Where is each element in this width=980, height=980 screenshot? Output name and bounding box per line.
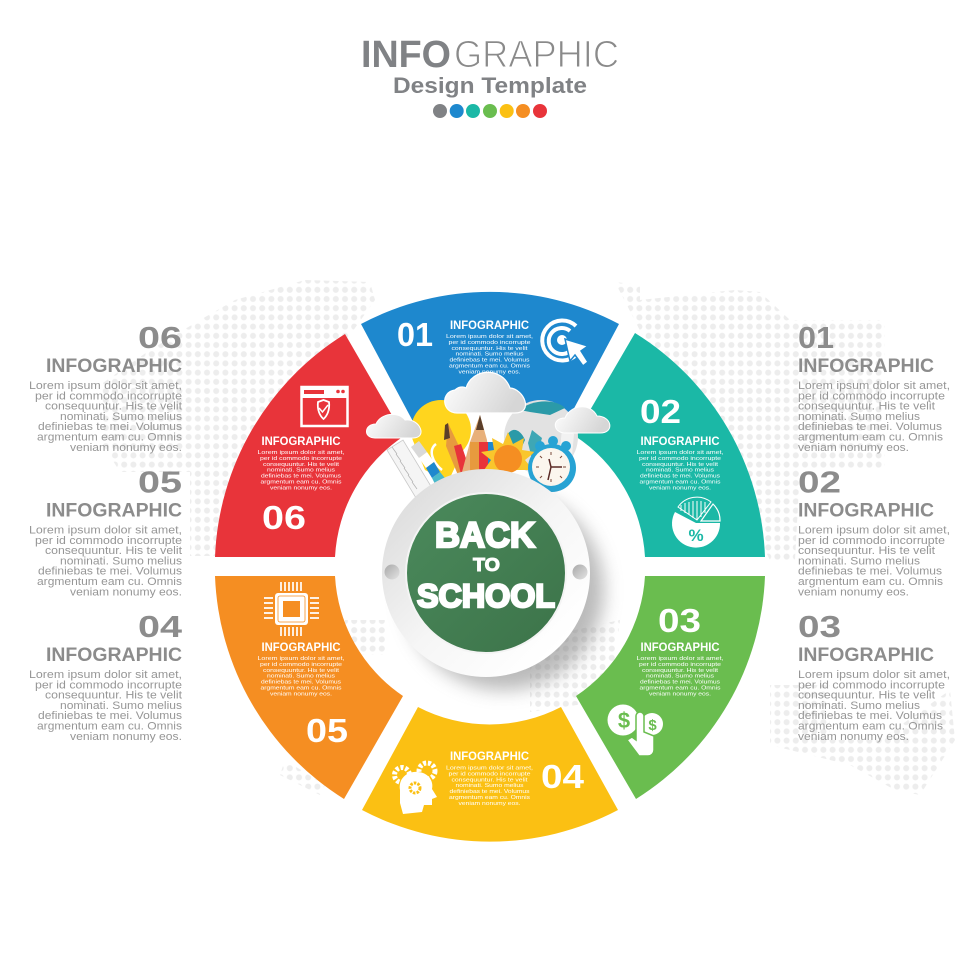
right rivet [572,564,588,580]
side text: 06: 06 [138,320,182,355]
side text: 05: definiebas te mei. Volumus [38,566,183,578]
heading and body 02: veniam nonumy eos. [649,485,711,491]
number 03: 03 [658,602,701,639]
center badge [382,469,590,677]
heading and body 01: definiebas te mei. Volumus [450,358,530,364]
heading and body 03: argmentum eam cu. Omnis [640,686,721,692]
heading and body 02: argmentum eam cu. Omnis [640,480,721,486]
heading and body 02: definiebas te mei. Volumus [640,474,720,480]
side text: 05: consequuntur. His te velit [45,545,182,557]
side text: 06: argmentum eam cu. Omnis [37,432,183,444]
heading and body 02: nominati. Sumo melius [646,468,714,474]
cloud: center large [445,372,525,413]
side text: 02: per id commodo incorrupte [798,535,945,547]
heading and body 01 [446,318,533,375]
cloud: right small [555,407,610,433]
icon: ruler [387,440,432,498]
side text: 03: 03 [798,609,841,644]
heading and body 06: nominati. Sumo melius [267,468,335,474]
side text: 06 [29,320,183,454]
side text: 01: INFOGRAPHIC [798,356,934,377]
side text: 04: veniam nonumy eos. [70,731,182,743]
panel: segment 04 yellow [362,707,618,842]
panel: segment 05 orange [215,576,403,799]
side text: 03 [798,609,950,743]
subtitle: Design Template [393,73,587,98]
side text: 04: INFOGRAPHIC [46,645,182,666]
side text: 03: consequuntur. His te velit [798,690,935,702]
icon: bulb base swatches [411,441,448,490]
left rivet [384,564,400,580]
side text: 01: 01 [798,320,834,355]
heading and body 04: INFOGRAPHIC [450,749,529,763]
side text: 02: Lorem ipsum dolor sit amet, [798,524,950,536]
heading and body 06: per id commodo incorrupte [260,456,343,462]
side text: 01: argmentum eam cu. Omnis [798,432,944,444]
icon: microchip [264,582,319,636]
heading and body 05: nominati. Sumo melius [267,674,335,680]
text: TO: TO [473,555,500,575]
icon: light bulb [411,400,471,482]
side text: 03: INFOGRAPHIC [798,645,934,666]
side text: 06: nominati. Sumo melius [60,411,183,423]
heading and body 02: Lorem ipsum dolor sit amet, [636,450,724,456]
text: BACK: BACK [435,516,535,555]
heading and body 01: argmentum eam cu. Omnis [449,364,530,370]
heading and body 01: nominati. Sumo melius [456,352,524,358]
number 02: 02 [640,393,681,430]
number 05: 05 [306,712,348,749]
heading and body 06: veniam nonumy eos. [270,485,332,491]
side text: 03: per id commodo incorrupte [798,679,945,691]
icon: pie chart with percent [672,497,720,548]
side text: 05: nominati. Sumo melius [60,555,183,567]
side text: 01: consequuntur. His te velit [798,401,935,413]
heading and body 05: per id commodo incorrupte [260,662,343,668]
text: SCHOOL: SCHOOL [417,578,555,614]
side text: 03: Lorem ipsum dolor sit amet, [798,669,950,681]
heading and body 06: consequuntur. His te velit [263,462,339,468]
heading and body 02: per id commodo incorrupte [639,456,722,462]
heading and body 06: definiebas te mei. Volumus [261,474,341,480]
icon: globe [504,400,578,474]
icon: dollar coins and pointing hand: $ [648,717,657,734]
side text: 05: INFOGRAPHIC [46,500,182,522]
heading and body 04: consequuntur. His te velit [452,777,528,783]
icon: dollar coins and pointing hand: $ [618,708,630,733]
side text: 02: INFOGRAPHIC [798,500,934,522]
number 01: 01 [397,316,433,353]
side text: 02: argmentum eam cu. Omnis [798,576,944,588]
side text: 06: per id commodo incorrupte [35,390,182,402]
heading and body 01: INFOGRAPHIC [450,318,529,332]
school supplies cluster [387,400,578,498]
heading and body 02: INFOGRAPHIC [640,434,720,448]
icon: coloured pencils [444,415,496,480]
heading and body 01: consequuntur. His te velit [452,346,528,352]
heading and body 06: Lorem ipsum dolor sit amet, [258,450,345,456]
heading and body 03: per id commodo incorrupte [639,662,722,668]
heading and body 04: Lorem ipsum dolor sit amet, [446,766,533,772]
side text: 02: veniam nonumy eos. [798,586,909,598]
heading and body 05: Lorem ipsum dolor sit amet, [258,656,345,662]
side text: 04: 04 [138,609,183,644]
heading and body 03: Lorem ipsum dolor sit amet, [636,656,724,662]
heading and body 05: INFOGRAPHIC [262,640,341,654]
panel: segment 06 red [215,334,404,557]
side text: 06: Lorem ipsum dolor sit amet, [29,380,182,392]
icon: sun [481,432,535,473]
heading and body 03 [636,640,724,697]
ring drop shadow [404,490,604,690]
title word: GRAPHIC: GRAPHIC [454,34,619,76]
heading and body 06 [258,434,345,491]
side text: 02: nominati. Sumo melius [798,555,921,567]
heading and body 03: consequuntur. His te velit [642,668,718,674]
side text: 03: argmentum eam cu. Omnis [798,720,944,732]
side text: 06: consequuntur. His te velit [45,401,182,413]
heading and body 01: Lorem ipsum dolor sit amet, [446,334,533,340]
heading and body 05: veniam nonumy eos. [270,691,332,697]
outer white ring [382,469,590,677]
side text: 01: Lorem ipsum dolor sit amet, [798,380,950,392]
number 04: 04 [541,758,585,795]
side text: 02 [798,464,950,598]
dotted world map background [100,280,955,795]
side text: 04: definiebas te mei. Volumus [38,710,183,722]
heading and body 06: INFOGRAPHIC [262,434,341,448]
side text: 05: Lorem ipsum dolor sit amet, [29,524,182,536]
icon: browser window with shield [302,387,348,426]
heading and body 01: veniam nonumy eos. [458,369,521,375]
number 06: 06 [262,499,306,536]
heading and body 05: argmentum eam cu. Omnis [260,686,342,692]
side text: 02: 02 [798,464,841,500]
side text: 05: per id commodo incorrupte [35,535,182,547]
side text: 06: INFOGRAPHIC [46,356,182,377]
side text: 01: veniam nonumy eos. [798,442,909,454]
heading and body 03: INFOGRAPHIC [640,640,720,654]
side text: 04: per id commodo incorrupte [35,679,182,691]
heading and body 04: argmentum eam cu. Omnis [449,795,530,801]
side text: 04: nominati. Sumo melius [60,700,183,712]
side text: 01: per id commodo incorrupte [798,390,945,402]
icon: alarm clock [528,436,576,492]
icon: pie chart with percent: % [688,526,704,545]
side text: 05: 05 [138,464,182,500]
heading and body 05 [258,640,345,697]
side text: 05 [29,464,183,598]
side text: 05: argmentum eam cu. Omnis [37,576,183,588]
side text: 06: definiebas te mei. Volumus [38,421,183,433]
side text: 01: definiebas te mei. Volumus [798,421,943,433]
side text: 03: veniam nonumy eos. [798,731,909,743]
side text: 04: consequuntur. His te velit [45,690,182,702]
side text: 05: veniam nonumy eos. [70,586,182,598]
side text: 02: definiebas te mei. Volumus [798,566,943,578]
side text: 01: nominati. Sumo melius [798,411,921,423]
heading and body 04: veniam nonumy eos. [458,801,521,807]
heading and body 04: definiebas te mei. Volumus [450,789,530,795]
heading and body 01: per id commodo incorrupte [448,340,531,346]
heading and body 04: per id commodo incorrupte [448,771,531,777]
side text: 03: nominati. Sumo melius [798,700,921,712]
heading and body 04 [446,749,533,807]
side text: 04: Lorem ipsum dolor sit amet, [29,669,182,681]
cloud: left small [366,414,421,438]
heading and body 03: nominati. Sumo melius [646,674,714,680]
heading and body 02 [636,434,724,491]
heading and body 06: argmentum eam cu. Omnis [260,480,342,486]
side text: 04 [29,609,183,743]
icon: head with gears [394,763,437,814]
heading and body 05: definiebas te mei. Volumus [261,680,341,686]
heading and body 03: veniam nonumy eos. [649,691,711,697]
side text: 02: consequuntur. His te velit [798,545,935,557]
green chalkboard disc [406,493,566,653]
side text: 01 [798,320,950,454]
heading and body 03: definiebas te mei. Volumus [640,680,720,686]
panel: segment 02 teal [575,333,765,557]
side text: 03: definiebas te mei. Volumus [798,710,943,722]
colour dots row [433,104,547,118]
title word: INFO: INFO [361,34,451,76]
heading and body 04: nominati. Sumo melius [456,783,524,789]
icon: dollar coins and pointing hand [608,704,663,756]
side text: 04: argmentum eam cu. Omnis [37,720,183,732]
panel: segment 01 blue [361,292,619,429]
title [361,34,619,98]
icon: target with cursor [542,321,588,366]
panel: segment 03 green [576,576,765,799]
heading and body 02: consequuntur. His te velit [642,462,718,468]
heading and body 05: consequuntur. His te velit [263,668,339,674]
side text: 06: veniam nonumy eos. [70,442,182,454]
